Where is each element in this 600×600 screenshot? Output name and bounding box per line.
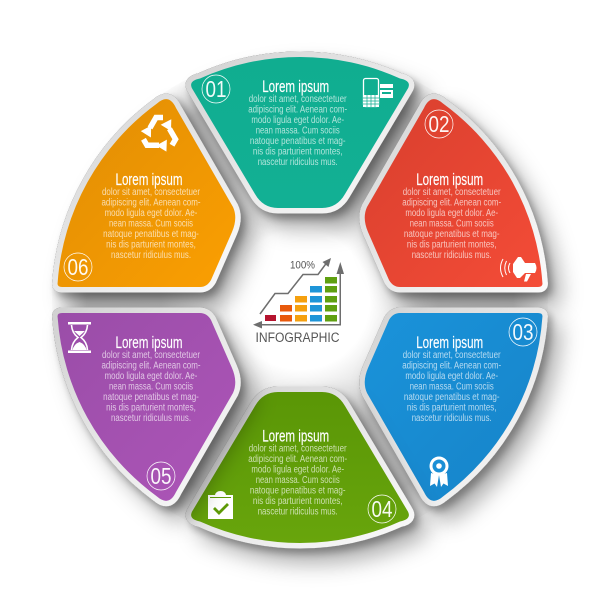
heading and body text: nascetur ridiculus mus. <box>412 413 492 424</box>
center chart <box>253 258 344 345</box>
heading and body text: nascetur ridiculus mus. <box>111 250 191 261</box>
number 02: 02 <box>428 111 450 137</box>
heading and body text: adipiscing elit. Aenean com- <box>102 198 200 208</box>
icon: hourglass <box>68 322 91 353</box>
heading and body text: nean massa. Cum sociis <box>410 218 494 230</box>
heading and body text: adipiscing elit. Aenean com- <box>402 198 501 208</box>
heading and body text: Lorem ipsum <box>416 334 483 352</box>
heading and body text: modo ligula eget dolor. Ae- <box>105 371 197 382</box>
panel 3: blue <box>365 313 542 501</box>
heading and body text: modo ligula eget dolor. Ae- <box>105 208 197 219</box>
axes arrows <box>253 262 344 328</box>
heading and body text: natoque penatibus et mag- <box>103 229 199 240</box>
heading and body text: dolor sit amet, consectetuer <box>249 444 347 454</box>
heading and body text: dolor sit amet, consectetuer <box>403 350 501 361</box>
heading and body text <box>402 171 501 261</box>
heading and body text: modo ligula eget dolor. Ae- <box>251 464 344 476</box>
center backdrop <box>52 52 548 548</box>
heading and body text: nis dis parturient montes, <box>407 240 497 250</box>
heading and body text: modo ligula eget dolor. Ae- <box>405 208 498 219</box>
panel 4: green <box>191 392 409 543</box>
heading and body text <box>102 334 201 424</box>
icon: megaphone <box>500 257 536 282</box>
heading and body text: dolor sit amet, consectetuer <box>102 187 201 198</box>
panel 1: teal <box>191 57 409 208</box>
heading and body text: natoque penatibus et mag- <box>404 392 500 403</box>
bar chart <box>265 277 337 322</box>
heading and body text: Lorem ipsum <box>262 78 329 96</box>
heading and body text: adipiscing elit. Aenean com- <box>102 360 200 372</box>
heading and body text: nean massa. Cum sociis <box>109 218 193 230</box>
panel 2: red <box>365 99 542 287</box>
trend arrow <box>260 258 331 314</box>
heading and body text: nean massa. Cum sociis <box>256 126 340 136</box>
heading and body text: adipiscing elit. Aenean com- <box>248 454 347 465</box>
heading and body text: nascetur ridiculus mus. <box>111 413 191 424</box>
heading and body text: nean massa. Cum sociis <box>410 382 494 392</box>
icon: phone and card <box>363 78 393 107</box>
heading and body text: nascetur ridiculus mus. <box>258 506 338 518</box>
heading and body text: nis dis parturient montes, <box>106 402 196 414</box>
number 03: 03 <box>512 319 534 345</box>
icon: clipboard check <box>208 491 233 519</box>
number 01: 01 <box>206 76 226 102</box>
icon: recycle <box>139 118 179 152</box>
heading and body text: modo ligula eget dolor. Ae- <box>251 115 344 126</box>
icon: ribbon badge <box>430 456 448 487</box>
heading and body text <box>248 428 347 518</box>
heading and body text: natoque penatibus et mag- <box>404 229 500 240</box>
heading and body text: dolor sit amet, consectetuer <box>102 350 201 361</box>
label INFOGRAPHIC: INFOGRAPHIC <box>256 330 340 345</box>
heading and body text <box>402 334 501 424</box>
heading and body text: dolor sit amet, consectetuer <box>249 94 347 105</box>
heading and body text: dolor sit amet, consectetuer <box>403 187 501 198</box>
number 05: 05 <box>150 463 172 489</box>
heading and body text: Lorem ipsum <box>116 334 182 352</box>
heading and body text <box>102 171 201 261</box>
heading and body text: modo ligula eget dolor. Ae- <box>405 371 498 382</box>
heading and body text: nis dis parturient montes, <box>407 402 497 414</box>
heading and body text: nis dis parturient montes, <box>253 146 343 158</box>
number 04: 04 <box>372 496 393 522</box>
heading and body text: nean massa. Cum sociis <box>256 475 340 486</box>
heading and body text: nean massa. Cum sociis <box>109 382 193 392</box>
heading and body text: natoque penatibus et mag- <box>250 486 346 496</box>
panel 5: purple <box>58 313 235 501</box>
heading and body text: nis dis parturient montes, <box>106 240 196 250</box>
heading and body text: Lorem ipsum <box>116 171 182 189</box>
heading and body text: adipiscing elit. Aenean com- <box>248 104 347 116</box>
heading and body text: Lorem ipsum <box>262 428 329 446</box>
heading and body text: natoque penatibus et mag- <box>250 136 346 147</box>
heading and body text: Lorem ipsum <box>416 171 483 189</box>
heading and body text: nis dis parturient montes, <box>253 496 343 507</box>
heading and body text: adipiscing elit. Aenean com- <box>402 360 501 372</box>
heading and body text: natoque penatibus et mag- <box>103 392 199 403</box>
heading and body text: nascetur ridiculus mus. <box>258 157 338 168</box>
label 100%: 100% <box>290 260 315 272</box>
heading and body text: nascetur ridiculus mus. <box>412 250 492 261</box>
heading and body text <box>248 78 347 168</box>
number 06: 06 <box>68 254 88 280</box>
panel 6: orange <box>58 99 235 287</box>
